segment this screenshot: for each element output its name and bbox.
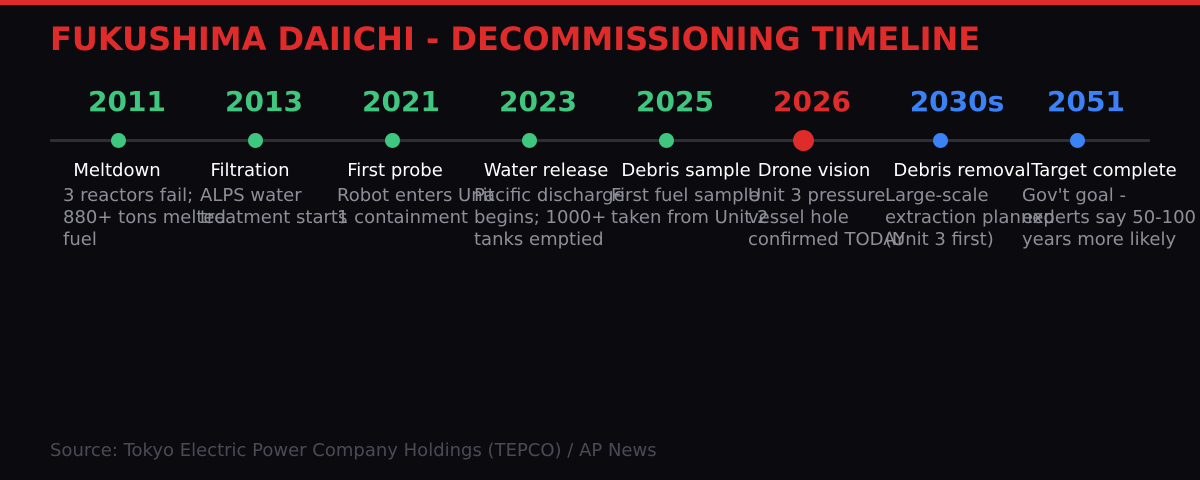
desc 2023: tanks emptied [474, 229, 604, 250]
source: Source: Tokyo Electric Power Company Holdings (TEPCO) / AP News [50, 440, 657, 461]
dot 2026 [792, 130, 814, 151]
desc 2011 [63, 185, 226, 250]
year 2023: 2023 [499, 85, 577, 118]
label Debris removal: Debris removal [893, 160, 1031, 181]
desc 2011: 3 reactors fail; [63, 185, 193, 206]
desc 2013: ALPS water [200, 185, 302, 206]
desc 2051 [1022, 185, 1196, 250]
desc 2025: First fuel sample [611, 185, 760, 206]
dot 2021 [384, 133, 400, 148]
desc 2021: 1 containment [337, 207, 468, 228]
label Meltdown: Meltdown [73, 160, 161, 181]
desc 2021 [337, 185, 495, 228]
desc 2023 [474, 185, 625, 250]
label First probe: First probe [347, 160, 443, 181]
desc 2013: treatment starts [200, 207, 347, 228]
year 2013: 2013 [225, 85, 303, 118]
desc 2021: Robot enters Unit [337, 185, 495, 206]
desc 2011: 880+ tons melted [63, 207, 226, 228]
desc 2030s [885, 185, 1055, 250]
title: FUKUSHIMA DAIICHI - DECOMMISSIONING TIMELINE [50, 20, 980, 58]
desc 2051: Gov't goal - [1022, 185, 1126, 206]
label Drone vision: Drone vision [758, 160, 870, 181]
desc 2011: fuel [63, 229, 97, 250]
desc 2030s: Large-scale [885, 185, 989, 206]
year 2030s: 2030s [910, 85, 1004, 118]
dot 2013 [248, 133, 262, 148]
label Debris sample: Debris sample [621, 160, 751, 181]
dot 2030s [932, 133, 948, 148]
label Water release: Water release [484, 160, 608, 181]
milestones [63, 85, 1196, 250]
top bar [0, 0, 1200, 5]
dot 2051 [1070, 133, 1084, 148]
desc 2025: taken from Unit 2 [611, 207, 768, 228]
desc 2051: years more likely [1022, 229, 1176, 250]
year 2026: 2026 [773, 85, 851, 118]
desc 2026 [748, 185, 906, 250]
timeline line [50, 139, 1150, 142]
year 2051: 2051 [1047, 85, 1125, 118]
label Filtration: Filtration [210, 160, 290, 181]
dot 2023 [522, 133, 536, 148]
desc 2013 [200, 185, 347, 228]
year 2025: 2025 [636, 85, 714, 118]
dot 2011 [110, 133, 126, 148]
desc 2051: experts say 50-100 [1022, 207, 1196, 228]
dot 2025 [658, 133, 674, 148]
desc 2025 [611, 185, 768, 228]
desc 2030s: (Unit 3 first) [885, 229, 994, 250]
desc 2026: confirmed TODAY [748, 229, 905, 250]
year 2021: 2021 [362, 85, 440, 118]
desc 2026: vessel hole [748, 207, 849, 228]
desc 2030s: extraction planned [885, 207, 1055, 228]
desc 2026: Unit 3 pressure [748, 185, 885, 206]
desc 2023: Pacific discharge [474, 185, 625, 206]
year 2011: 2011 [88, 85, 166, 118]
label Target complete: Target complete [1031, 160, 1177, 181]
desc 2023: begins; 1000+ [474, 207, 606, 228]
